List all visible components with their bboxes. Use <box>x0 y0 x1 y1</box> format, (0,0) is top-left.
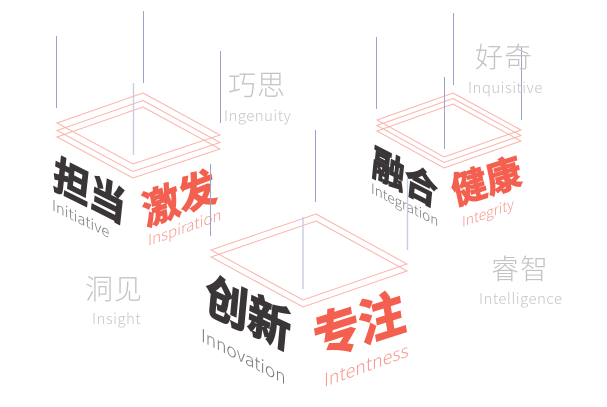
label: 健康: 健康 <box>446 143 526 216</box>
vertical line over diamonds <box>302 217 304 289</box>
trait: 洞见 Insight: Insight <box>92 308 141 329</box>
trait: 好奇 Inquisitive: 好奇 <box>475 36 533 76</box>
trait: 好奇 Inquisitive: Inquisitive <box>468 77 543 98</box>
stacked diamond outlines <box>57 93 220 178</box>
label: Innovation: Innovation <box>201 321 286 390</box>
label: Inspiration: Inspiration <box>148 202 221 251</box>
vertical line behind centre cube <box>314 130 316 202</box>
stacked diamond outlines <box>377 93 521 168</box>
trait: 睿智 Intelligence: 睿智 <box>491 248 549 288</box>
label: 担当: 担当 <box>51 142 129 235</box>
trait: 巧思 Ingenuity: 巧思 <box>228 64 286 104</box>
vertical lines behind left cube <box>56 11 220 123</box>
trait: 巧思 Ingenuity <box>224 64 291 126</box>
cube: Integration and Integrity <box>370 13 526 250</box>
stacked diamond outlines <box>211 214 407 307</box>
label: Initiative: Initiative <box>52 193 109 243</box>
vertical line over diamonds <box>444 77 446 149</box>
label: 融合: 融合 <box>370 133 440 218</box>
trait: 睿智 Intelligence: Intelligence <box>479 288 563 309</box>
vertical lines behind right cube <box>376 13 522 120</box>
cube: Initiative and Inspiration <box>51 11 221 251</box>
label: 创新: 创新 <box>203 256 294 364</box>
trait: 巧思 Ingenuity: Ingenuity <box>224 105 291 126</box>
cube: Innovation and Intentness <box>201 130 409 393</box>
vertical line over diamonds <box>132 83 134 155</box>
trait: 好奇 Inquisitive <box>468 36 543 98</box>
label: 专注: 专注 <box>308 272 409 371</box>
trait: 洞见 Insight: 洞见 <box>85 268 143 308</box>
vertical line over red label <box>210 164 212 236</box>
vertical line over integration label <box>406 178 408 250</box>
label: 激发: 激发 <box>137 155 220 238</box>
trait: 洞见 Insight <box>85 268 143 329</box>
label: Integration: Integration <box>371 178 438 231</box>
label: Intentness: Intentness <box>324 336 409 393</box>
label: Integrity: Integrity <box>462 193 514 232</box>
trait: 睿智 Intelligence <box>479 248 563 309</box>
